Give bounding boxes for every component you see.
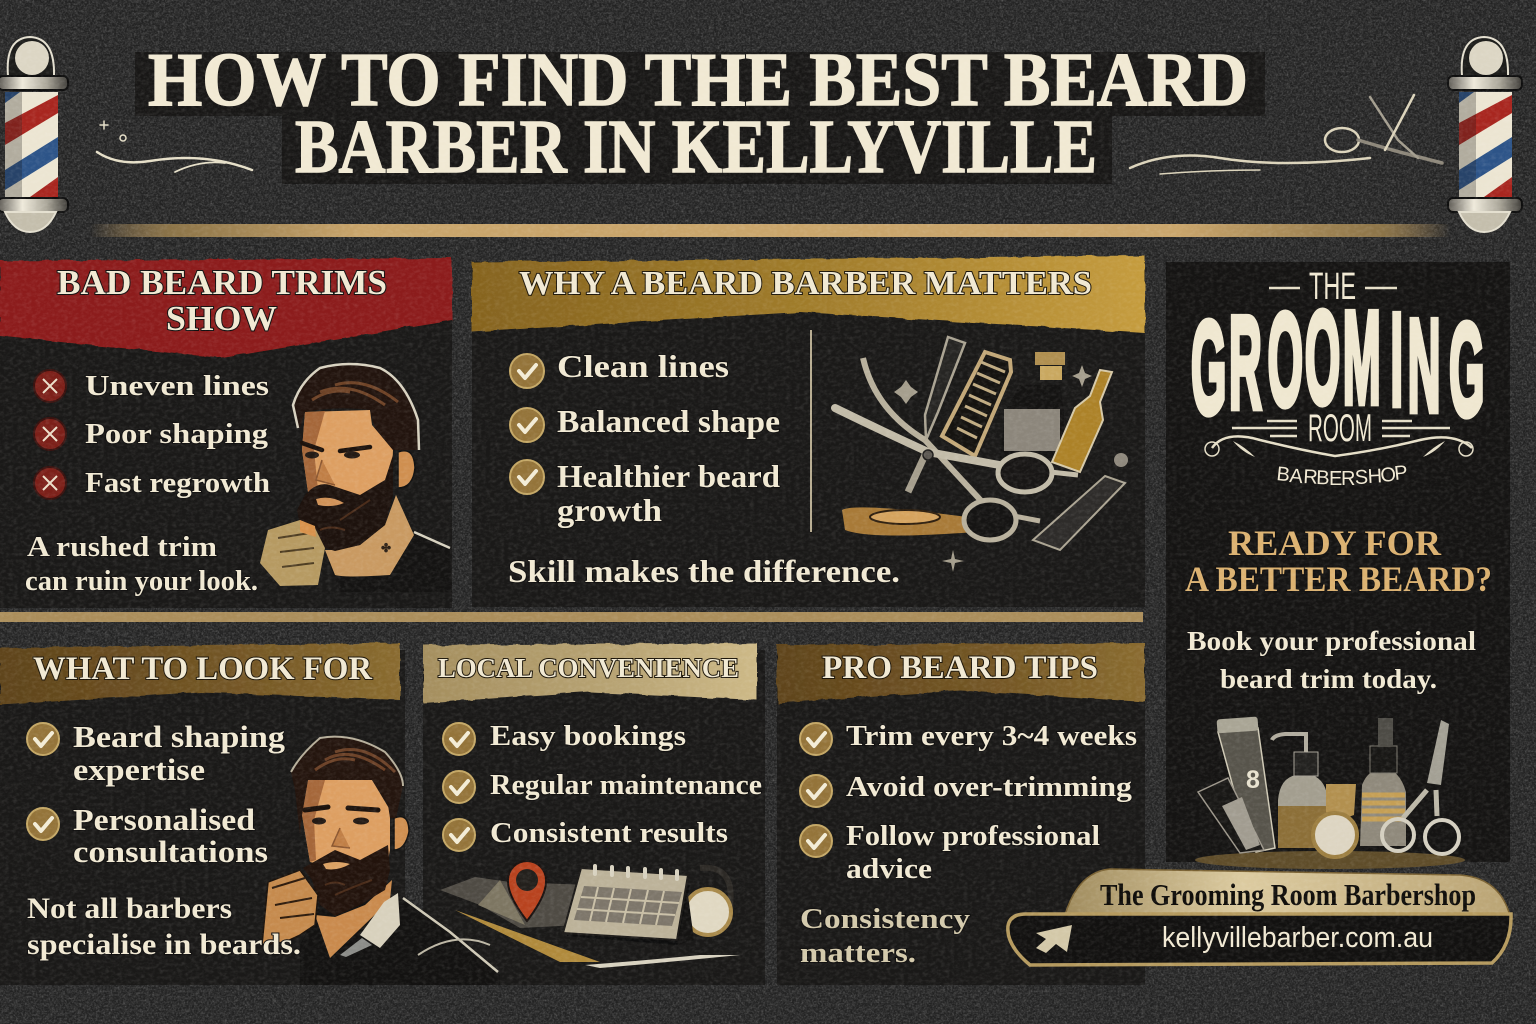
- call to action heading: READY FOR: [1228, 523, 1442, 563]
- red banner heading: BAD BEARD TRIMS: [57, 263, 387, 302]
- panel: pro beard tips: [777, 643, 1145, 985]
- checklist: Personalised: [73, 802, 255, 837]
- list of bad trim signs: [34, 370, 270, 499]
- brown banner heading: [0, 643, 400, 705]
- brown banner heading: PRO BEARD TIPS: [822, 650, 1098, 686]
- icon: right barber pole: [1448, 37, 1522, 232]
- portrait: bearded man: ✤: [381, 541, 391, 555]
- checklist: [510, 348, 780, 528]
- illustration: grooming products: 8: [1246, 766, 1260, 794]
- brown banner heading: WHAT TO LOOK FOR: [33, 651, 373, 687]
- panel: grooming room brand and call to action: [1166, 262, 1510, 869]
- illustration: map pin, calendar and clock: [440, 861, 740, 968]
- brown banner heading: [777, 643, 1145, 703]
- list of bad trim signs: Uneven lines: [85, 370, 269, 402]
- checklist: Avoid over-trimming: [846, 772, 1132, 803]
- portrait: bearded man: [260, 364, 452, 592]
- portrait: bearded man in suit: [262, 737, 500, 985]
- title: BARBER IN KELLYVILLE: [295, 105, 1097, 189]
- checklist: Follow professional: [846, 821, 1100, 852]
- checklist: advice: [846, 854, 932, 885]
- checklist: Trim every 3~4 weeks: [846, 721, 1137, 752]
- call to action text: [1187, 626, 1477, 694]
- icon: cursor arrow: [1036, 925, 1072, 953]
- red banner heading: SHOW: [166, 299, 277, 338]
- flourish: left swirl: [97, 121, 252, 172]
- gold row divider: [0, 612, 1143, 622]
- caption: Consistency: [800, 903, 971, 935]
- light gold banner heading: [423, 643, 757, 703]
- caption: Not all barbers: [27, 892, 232, 925]
- checklist: Beard shaping: [73, 719, 286, 754]
- flourish: right scissors and swirl: [1130, 95, 1442, 174]
- checklist: [800, 721, 1137, 885]
- checklist: [443, 721, 762, 851]
- checklist: consultations: [73, 834, 268, 869]
- icon: left barber pole: [0, 37, 68, 232]
- caption: [27, 892, 301, 961]
- gold banner heading: [472, 256, 1145, 333]
- illustration: grooming products: [1195, 717, 1465, 869]
- contact banner: kellyvillebarber.com.au: [1162, 922, 1433, 954]
- title: [135, 38, 1265, 189]
- call to action heading: A BETTER BEARD?: [1185, 559, 1492, 599]
- gold banner heading: WHY A BEARD BARBER MATTERS: [519, 265, 1092, 302]
- list of bad trim signs: Fast regrowth: [85, 467, 270, 499]
- panel: bad beard trims show: [0, 258, 452, 608]
- logo: the grooming room barbershop: THE: [1309, 266, 1356, 308]
- checklist: Clean lines: [557, 348, 729, 384]
- logo: the grooming room barbershop: ROOM: [1308, 407, 1372, 450]
- list of bad trim signs: Poor shaping: [85, 418, 269, 450]
- contact banner: [1008, 869, 1511, 965]
- checklist: [27, 719, 286, 869]
- caption: [800, 903, 971, 969]
- logo: the grooming room barbershop: BARBERSHOP: [1275, 462, 1409, 490]
- panel: local convenience: [423, 643, 765, 985]
- caption: can ruin your look.: [25, 565, 258, 597]
- checklist: Regular maintenance: [490, 770, 762, 801]
- light gold banner heading: LOCAL CONVENIENCE: [438, 653, 739, 683]
- caption: Skill makes the difference.: [508, 553, 900, 589]
- panel: what to look for: [0, 643, 500, 985]
- caption: specialise in beards.: [27, 928, 301, 961]
- illustration: scissors, combs and bottles: [835, 337, 1128, 572]
- call to action heading: [1185, 523, 1492, 599]
- logo: the grooming room barbershop: GROOMING: [1191, 284, 1484, 443]
- checklist: Balanced shape: [557, 403, 780, 439]
- caption: A rushed trim: [27, 531, 217, 563]
- caption: [25, 531, 258, 597]
- gold divider bar: [90, 224, 1450, 237]
- checklist: Easy bookings: [490, 721, 686, 752]
- call to action text: beard trim today.: [1220, 664, 1437, 694]
- red banner heading: [0, 258, 452, 358]
- call to action text: Book your professional: [1187, 626, 1477, 656]
- panel: why a beard barber matters: [472, 256, 1145, 607]
- caption: matters.: [800, 937, 916, 969]
- contact banner: The Grooming Room Barbershop: [1100, 877, 1476, 912]
- checklist: expertise: [73, 752, 205, 787]
- checklist: Consistent results: [490, 818, 728, 849]
- title: HOW TO FIND THE BEST BEARD: [148, 38, 1248, 122]
- checklist: Healthier beard: [557, 458, 780, 494]
- checklist: growth: [557, 492, 662, 528]
